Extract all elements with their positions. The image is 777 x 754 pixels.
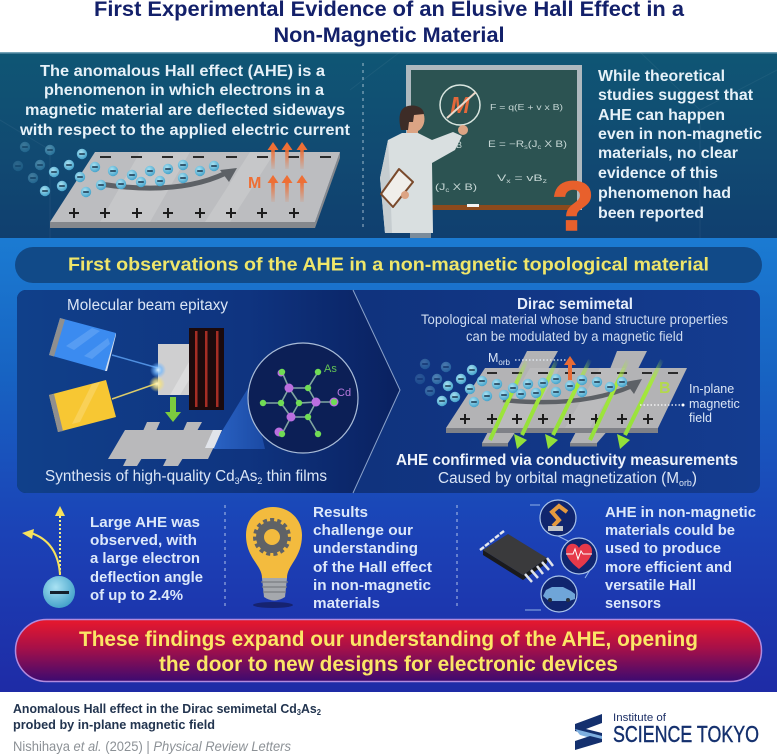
icon: robot arm bbox=[525, 500, 590, 610]
label: synthesis of thin films: 2 bbox=[257, 476, 262, 486]
arrow: electron deflection path bbox=[503, 386, 632, 402]
banner: first observations: First observations of the AHE in a non-magnetic topological material bbox=[68, 254, 709, 274]
icon: light bulb with gear bbox=[246, 507, 302, 608]
illustration: blackboard with equations: X B) bbox=[449, 182, 477, 193]
text: theoretical studies: AHE can happen bbox=[598, 107, 725, 124]
callout: conclusion pill bbox=[16, 620, 762, 682]
text: results: understanding bbox=[313, 540, 418, 557]
text: results: materials bbox=[313, 595, 380, 612]
label: in-plane magnetic field: field bbox=[689, 411, 712, 425]
footer: citation bbox=[13, 701, 322, 754]
icon: thin film bbox=[108, 422, 222, 466]
illustration: blackboard with equations: (J bbox=[435, 182, 443, 193]
magnifier wedge bbox=[213, 385, 265, 449]
text: AHE confirmed: AHE confirmed via conductivity measurements bbox=[396, 452, 738, 469]
label: in-plane magnetic field: In-plane bbox=[689, 382, 734, 396]
text: results: in non-magnetic bbox=[313, 577, 431, 594]
illustration: blackboard with equations: c bbox=[538, 145, 541, 151]
text: large AHE: of up to 2.4% bbox=[90, 587, 183, 604]
text: results: challenge our bbox=[313, 522, 413, 539]
heading: Dirac semimetal: Dirac semimetal bbox=[517, 296, 633, 313]
text: large AHE bbox=[90, 514, 203, 604]
label: M orb: M bbox=[488, 351, 498, 365]
label: M orb bbox=[488, 351, 568, 367]
illustration: blackboard with equations: F = q(E + v x B) bbox=[490, 103, 563, 112]
title bbox=[94, 0, 684, 47]
label: M magnetization arrows: M bbox=[248, 175, 261, 192]
text: AHE confirmed: orb bbox=[679, 478, 692, 488]
text: results: of the Hall effect bbox=[313, 559, 432, 576]
icon: yellow effusion cell bbox=[49, 380, 158, 432]
footer: citation: Nishihaya et al. (2025) | Physical Review Letters bbox=[13, 738, 291, 754]
icon: heart with pulse bbox=[561, 538, 597, 574]
text: AHE definition bbox=[19, 63, 351, 139]
illustration: blackboard with equations: B bbox=[456, 140, 462, 150]
text: theoretical studies: been reported bbox=[598, 205, 704, 222]
text: Hall sensors: versatile Hall bbox=[605, 577, 696, 594]
icon: clipboard bbox=[381, 169, 413, 207]
illustration: blackboard with equations: V bbox=[497, 173, 503, 184]
text: AHE definition: magnetic material are deflected sideways bbox=[25, 102, 345, 119]
text: theoretical studies: materials, no clear bbox=[598, 145, 738, 162]
illustration: blackboard with equations: c bbox=[445, 188, 449, 194]
panel: synthesis and measurement bbox=[17, 290, 760, 493]
text: AHE definition: phenomenon in which electrons in a bbox=[44, 82, 324, 99]
label: synthesis of thin films: As bbox=[240, 468, 258, 485]
banner: first observations bbox=[15, 247, 762, 283]
text: Dirac semimetal description: can be modulated by a magnetic field bbox=[466, 329, 683, 344]
icon: electron with deflection arrows bbox=[22, 506, 75, 608]
label: molecular beam epitaxy: Molecular beam epitaxy bbox=[67, 297, 228, 314]
panel: large AHE finding bbox=[22, 506, 203, 608]
footer: citation: As bbox=[301, 701, 317, 716]
arrow: orange M orb bbox=[564, 356, 576, 380]
icon: substrate and heater bbox=[149, 328, 224, 410]
text: Hall sensors: materials could be bbox=[605, 522, 735, 539]
text: Hall sensors: used to produce bbox=[605, 540, 721, 557]
icon: Hall sensor chip bbox=[480, 531, 553, 582]
title: Non-Magnetic Material bbox=[274, 24, 504, 47]
text: theoretical studies: While theoretical bbox=[598, 68, 725, 85]
text: Dirac semimetal description bbox=[421, 312, 728, 344]
callout: conclusion pill: the door to new designs for electronic devices bbox=[159, 653, 618, 676]
logo: Institute of Science Tokyo bbox=[575, 712, 759, 750]
footer: citation: probed by in-plane magnetic field bbox=[13, 717, 215, 732]
sub-panel: molecular beam epitaxy bbox=[45, 297, 358, 486]
text: Hall sensors: more efficient and bbox=[605, 559, 732, 576]
arrow: green down arrow bbox=[165, 397, 181, 422]
illustration: blackboard with equations: (J bbox=[528, 139, 538, 150]
illustration: Cd3As2 crystal structure: Cd bbox=[337, 387, 351, 399]
text: theoretical studies: phenomenon had bbox=[598, 185, 731, 202]
label: synthesis of thin films: Synthesis of high-quality Cd bbox=[45, 468, 237, 485]
label: M orb: orb bbox=[498, 358, 511, 367]
panel: AHE introduction bbox=[0, 52, 777, 245]
text: large AHE: Large AHE was bbox=[90, 514, 200, 531]
text: theoretical studies: studies suggest that bbox=[598, 87, 754, 104]
illustration: blackboard with equations: = vB bbox=[511, 173, 543, 184]
text: Hall sensors bbox=[605, 504, 756, 612]
text: large AHE: a large electron bbox=[90, 550, 200, 567]
diagram: magnetic material slab with electrons bbox=[13, 142, 340, 228]
label: in-plane magnetic field: magnetic bbox=[689, 397, 740, 411]
diagram: Hall bar device with in-plane field bbox=[415, 351, 740, 449]
illustration: blackboard with equations: X B) bbox=[541, 139, 567, 150]
sub-panel: Dirac semimetal bbox=[396, 296, 740, 488]
illustration: blackboard with equations: s bbox=[524, 145, 528, 151]
text: AHE confirmed bbox=[396, 452, 738, 488]
text: large AHE: observed, with bbox=[90, 532, 197, 549]
arrows: in-plane magnetic field bbox=[490, 360, 662, 440]
logo: Institute of Science Tokyo: Institute of bbox=[613, 712, 667, 724]
illustration: Cd3As2 crystal structure bbox=[248, 343, 358, 453]
illustration: Cd3As2 crystal structure: As bbox=[324, 363, 337, 375]
text: results bbox=[313, 504, 432, 612]
label: M magnetization arrows bbox=[248, 142, 308, 202]
footer: citation: 2 bbox=[317, 708, 322, 717]
text: theoretical studies: even in non-magnetic bbox=[598, 126, 762, 143]
arrow: electron deflection path bbox=[100, 173, 226, 188]
text: AHE definition: with respect to the applied electric current bbox=[19, 122, 351, 139]
panel: Hall sensor applications bbox=[480, 500, 756, 612]
text: results: Results bbox=[313, 504, 368, 521]
text: AHE confirmed: Caused by orbital magnetization (M bbox=[438, 470, 682, 487]
illustration: blackboard with equations: M bbox=[450, 92, 470, 118]
illustration: blackboard with equations: x bbox=[506, 179, 511, 185]
label: synthesis of thin films: 3 bbox=[235, 476, 240, 486]
text: Hall sensors: sensors bbox=[605, 595, 661, 612]
text: theoretical studies: evidence of this bbox=[598, 165, 718, 182]
illustration: blackboard with equations: z bbox=[543, 179, 547, 185]
label: synthesis of thin films: thin films bbox=[262, 468, 327, 485]
text: Dirac semimetal description: Topological material whose band structure properties bbox=[421, 312, 728, 327]
illustration: blackboard with equations: E = −R bbox=[488, 139, 518, 150]
text: AHE definition: The anomalous Hall effect (AHE) is a bbox=[40, 63, 325, 80]
text: theoretical studies bbox=[598, 68, 762, 222]
icon: car bbox=[541, 576, 577, 612]
illustration: scientist in lab coat bbox=[380, 105, 468, 238]
icon: orange question mark: ? bbox=[552, 167, 594, 245]
text: Hall sensors: AHE in non-magnetic bbox=[605, 504, 756, 521]
label: in-plane magnetic field bbox=[640, 382, 740, 425]
footer: citation: Anomalous Hall effect in the Dirac semimetal Cd bbox=[13, 701, 312, 716]
callout: conclusion pill: These findings expand our understanding of the AHE, opening bbox=[79, 628, 698, 651]
text: large AHE: deflection angle bbox=[90, 569, 203, 586]
illustration: blackboard with equations bbox=[406, 65, 582, 210]
icon: blue effusion cell bbox=[49, 318, 158, 371]
diagram: Hall bar device with in-plane field: B bbox=[659, 380, 671, 397]
footer: citation: 3 bbox=[297, 708, 302, 717]
panel: background of main blue area bbox=[0, 238, 777, 692]
text: AHE confirmed: ) bbox=[692, 470, 697, 487]
panel: results challenge understanding bbox=[246, 504, 432, 612]
